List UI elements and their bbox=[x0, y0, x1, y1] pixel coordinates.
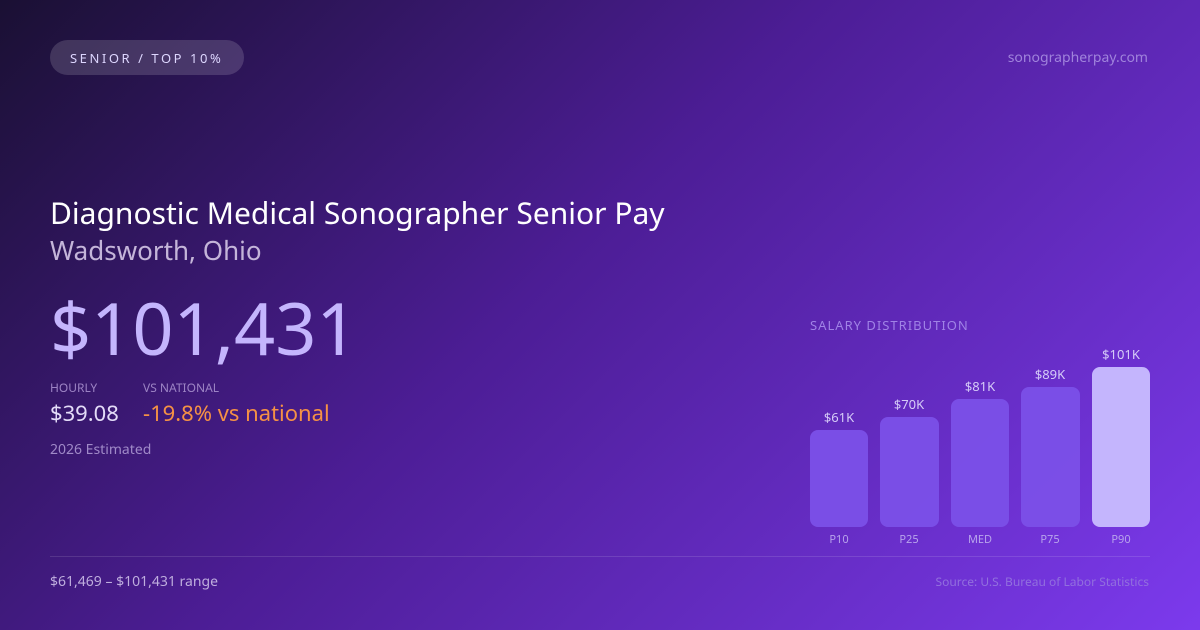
bar: P90: $101K bbox=[1102, 345, 1140, 363]
bar: P90 bbox=[1092, 345, 1150, 547]
bar: P10: $61K bbox=[824, 408, 854, 426]
main salary figure: $101,431 bbox=[50, 279, 358, 377]
badge: senior / top 10%: SENIOR / TOP 10% bbox=[70, 49, 223, 67]
bar: P25 bbox=[880, 395, 939, 547]
site name: sonographerpay.com bbox=[1008, 48, 1148, 67]
bar: P75 bbox=[1021, 365, 1080, 547]
bar: P25: $70K bbox=[894, 395, 924, 413]
stat: hourly: $39.08 bbox=[50, 398, 119, 428]
bar chart bbox=[810, 345, 1150, 547]
bar: P75: P75 bbox=[1040, 532, 1060, 547]
badge: senior / top 10% bbox=[50, 40, 244, 75]
salary range: $61,469 – $101,431 range bbox=[50, 572, 218, 591]
bar: P90: P90 bbox=[1111, 532, 1131, 547]
bar: P75: $89K bbox=[1035, 365, 1065, 383]
bar: median: $81K bbox=[965, 377, 995, 395]
bar: P10 bbox=[810, 408, 868, 547]
source: Source: U.S. Bureau of Labor Statistics bbox=[936, 573, 1149, 590]
bar: P10: P10 bbox=[829, 532, 849, 547]
stat: hourly: HOURLY bbox=[50, 379, 97, 396]
chart heading: SALARY DISTRIBUTION bbox=[810, 316, 969, 334]
bar: median: MED bbox=[968, 532, 992, 547]
stat: vs national: -19.8% vs national bbox=[143, 398, 330, 428]
title: Diagnostic Medical Sonographer Senior Pay bbox=[50, 192, 665, 233]
stat: vs national: VS NATIONAL bbox=[143, 379, 219, 396]
stat: hourly bbox=[50, 379, 119, 428]
bar: P25: P25 bbox=[899, 532, 919, 547]
estimate note: 2026 Estimated bbox=[50, 440, 151, 459]
bar: median bbox=[951, 377, 1009, 547]
location subtitle: Wadsworth, Ohio bbox=[50, 232, 262, 268]
stat: vs national bbox=[143, 379, 330, 428]
